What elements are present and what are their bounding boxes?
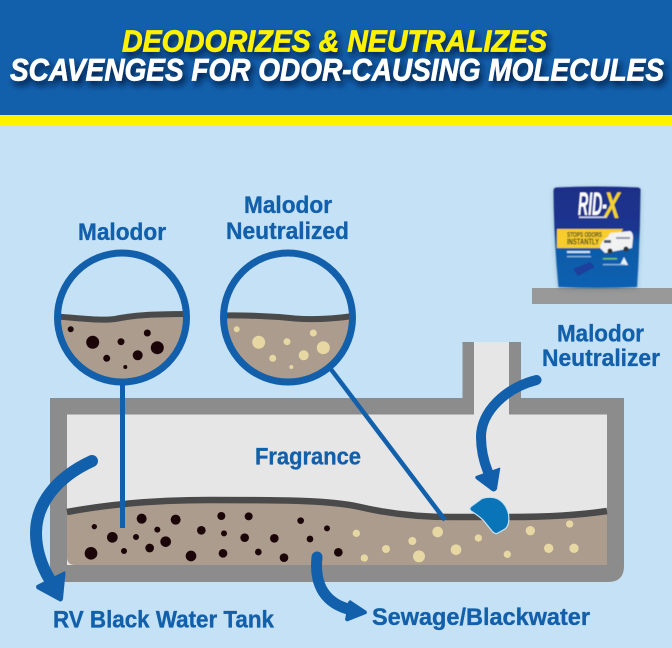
- arrow: malodor neutralizer: [475, 380, 536, 491]
- product package: X: [603, 185, 621, 226]
- label: malodor: Malodor: [78, 219, 166, 246]
- sewage in tank: [67, 500, 607, 565]
- tank body: [50, 342, 624, 582]
- product package: RID-: [578, 186, 607, 222]
- header banner: [0, 0, 672, 125]
- label: malodor neutralized: [226, 192, 349, 245]
- label: sewage/blackwater: Sewage/Blackwater: [372, 604, 590, 631]
- magnifier: neutralized: [220, 253, 360, 390]
- label: malodor neutralized: Malodor: [244, 192, 332, 219]
- arrow: RV black water tank: [36, 461, 92, 601]
- magnifier: malodor: [50, 253, 200, 390]
- sewage surface line: [67, 500, 607, 517]
- title: [10, 24, 664, 88]
- label: malodor neutralizer: Malodor: [557, 320, 644, 348]
- shelf: [532, 288, 672, 304]
- title: DEODORIZES & NEUTRALIZES: [122, 24, 548, 58]
- arrow: sewage: [317, 557, 367, 622]
- label: rv black water tank: RV Black Water Tank: [53, 606, 275, 634]
- magnifier lead line: neutralized: [330, 368, 445, 520]
- label: malodor neutralizer: Neutralizer: [542, 345, 660, 372]
- label: malodor neutralizer: [542, 320, 660, 372]
- neutralizer pod: [470, 497, 509, 534]
- product package: INSTANTLY: [567, 236, 599, 246]
- neutralized particles in tank: [353, 520, 579, 562]
- product package: STOPS ODORS: [567, 230, 602, 239]
- label: malodor neutralized: Neutralized: [226, 218, 349, 245]
- label: fragrance: Fragrance: [255, 444, 361, 470]
- magnifier lead line: malodor: [120, 380, 125, 528]
- product package: [554, 185, 641, 288]
- malodor particles in tank: [85, 512, 343, 562]
